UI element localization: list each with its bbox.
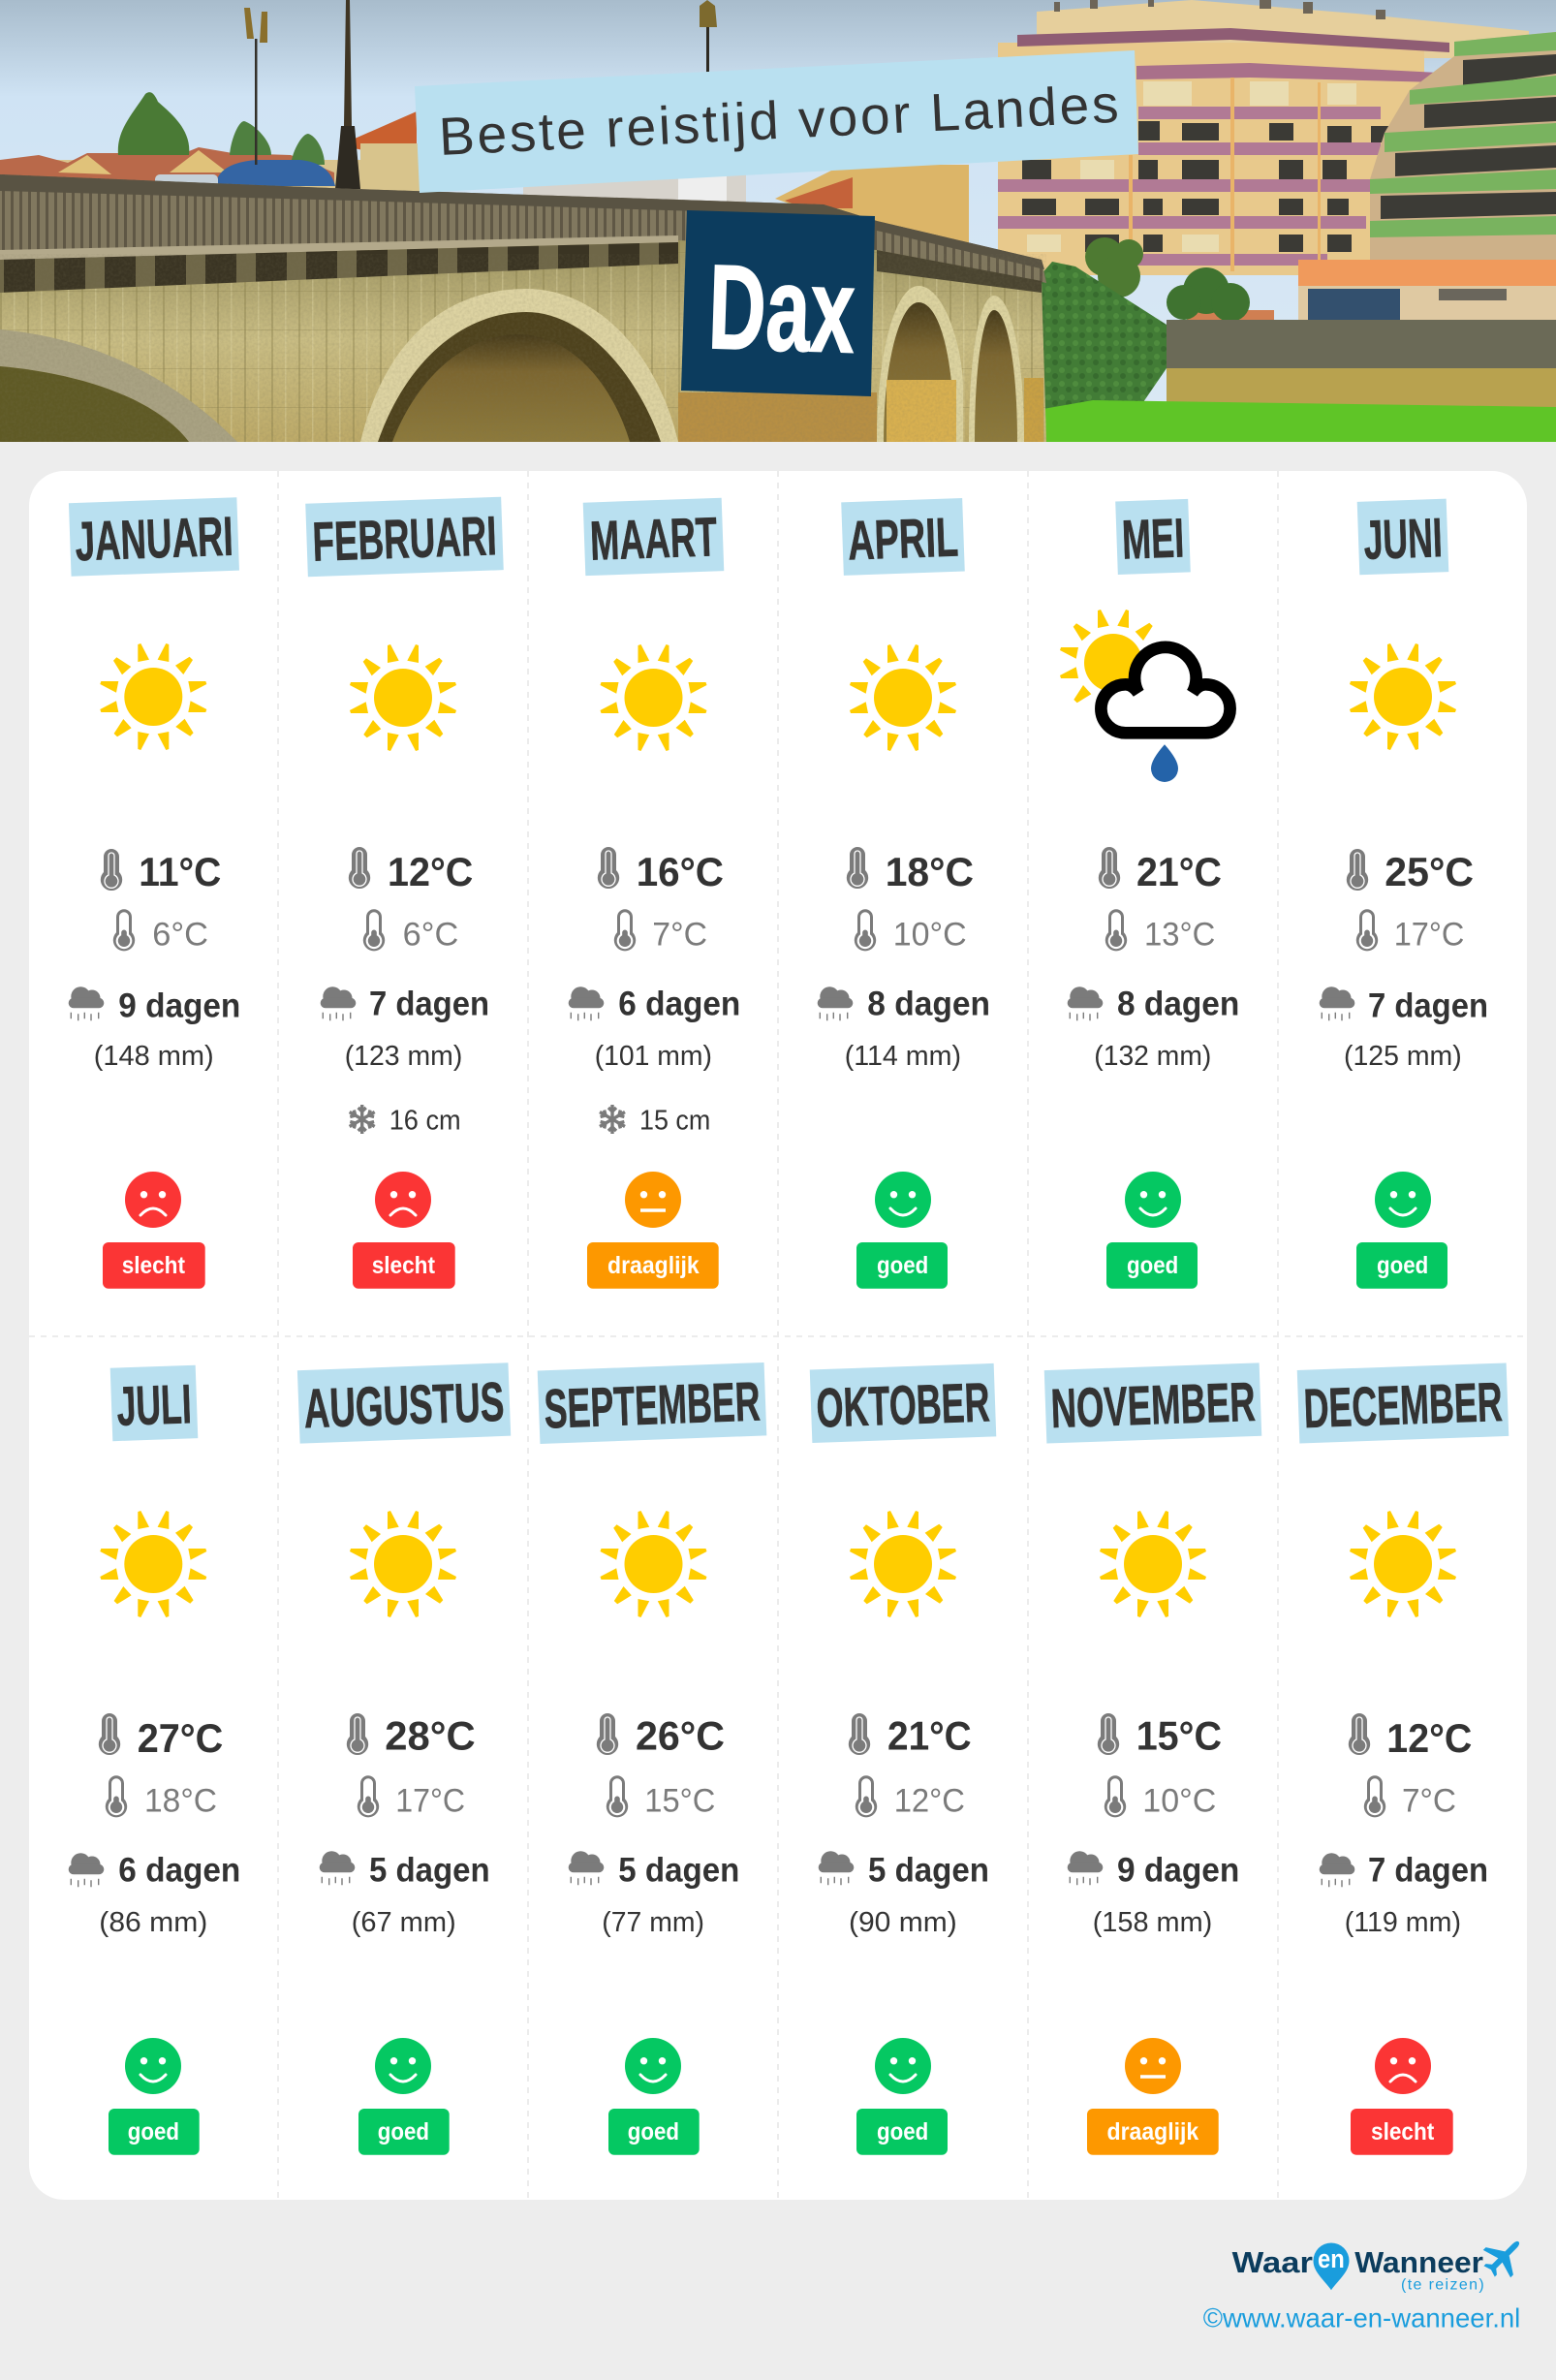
icon: min thermometer <box>1105 1775 1126 1817</box>
icon: max thermometer <box>349 847 370 889</box>
badge: draaglijk <box>587 1242 719 1289</box>
icon: max thermometer <box>101 849 122 891</box>
smiley: goed <box>875 1172 931 1228</box>
icon: min thermometer <box>614 909 636 951</box>
rain days: 9 dagen <box>118 986 240 1024</box>
rainfall: (125 mm) <box>1344 1041 1462 1072</box>
max temperature: 11°C <box>139 849 221 894</box>
month: juni <box>1320 499 1488 1289</box>
badge: goed: goed <box>378 2118 429 2145</box>
heading: april <box>841 498 965 576</box>
heading: oktober: OKTOBER <box>816 1371 991 1440</box>
rain days: 7 dagen <box>369 985 489 1022</box>
rain days: 5 dagen <box>369 1851 490 1889</box>
rainfall: (123 mm) <box>345 1041 462 1072</box>
badge: draaglijk: draaglijk <box>607 1252 700 1279</box>
icon: min thermometer <box>1356 909 1378 951</box>
month: januari <box>69 497 240 1289</box>
snowfall: 15 cm <box>639 1106 710 1137</box>
badge: goed <box>608 2109 700 2155</box>
icon: max thermometer <box>1347 849 1368 891</box>
badge: goed: goed <box>877 2118 928 2145</box>
icon: max thermometer <box>1349 1713 1370 1755</box>
month: mei <box>1060 499 1239 1289</box>
max temperature: 25°C <box>1385 849 1474 894</box>
max temperature: 12°C <box>1386 1715 1472 1761</box>
icon: rain <box>69 1853 104 1887</box>
max temperature: 15°C <box>1136 1713 1222 1759</box>
icon: sun <box>350 644 456 751</box>
title banner <box>415 50 1138 193</box>
badge: goed: goed <box>1377 1252 1428 1279</box>
smiley: slecht <box>125 1172 181 1228</box>
badge: draaglijk <box>1087 2109 1219 2155</box>
icon: location pin <box>1314 2242 1349 2290</box>
city label: Dax <box>706 240 856 379</box>
logo: Waar en Wanneer: Waar <box>1232 2245 1313 2279</box>
min temperature: 10°C <box>893 917 967 954</box>
month: oktober <box>810 1363 996 2155</box>
max temperature: 26°C <box>636 1713 725 1759</box>
badge: goed: goed <box>628 2118 679 2145</box>
heading: april: APRIL <box>847 507 959 572</box>
badge: goed <box>1106 1242 1198 1289</box>
month: maart <box>569 498 740 1289</box>
icon: sun <box>601 1511 707 1617</box>
icon: min thermometer <box>1364 1775 1385 1817</box>
rainfall: (67 mm) <box>352 1907 456 1938</box>
min temperature: 10°C <box>1142 1783 1216 1820</box>
icon: max thermometer <box>849 1713 870 1755</box>
badge: slecht <box>103 1242 205 1289</box>
icon: max thermometer <box>1099 847 1120 889</box>
icon: min thermometer <box>363 909 385 951</box>
smiley: goed <box>1125 1172 1181 1228</box>
icon: rain <box>1068 986 1103 1020</box>
heading: februari: FEBRUARI <box>312 505 498 574</box>
icon: min thermometer <box>1105 909 1127 951</box>
icon: rain <box>320 1851 355 1885</box>
badge: goed <box>856 1242 948 1289</box>
max temperature: 28°C <box>385 1713 476 1759</box>
icon: sun <box>850 1511 956 1617</box>
icon: snow <box>348 1105 377 1134</box>
header photo: bridge in Dax <box>0 0 1556 442</box>
heading: maart <box>583 498 724 576</box>
heading: september <box>538 1362 766 1444</box>
icon: min thermometer <box>106 1775 127 1817</box>
icon: max thermometer <box>598 847 619 889</box>
month: april <box>818 498 990 1289</box>
badge: goed: goed <box>877 1252 928 1279</box>
icon: sun behind cloud with rain drop <box>1060 610 1230 782</box>
rain days: 5 dagen <box>868 1851 989 1889</box>
heading: februari <box>305 497 504 577</box>
heading: augustus: AUGUSTUS <box>302 1371 505 1440</box>
icon: sun <box>1350 1511 1456 1617</box>
icon: max thermometer <box>847 847 868 889</box>
months card <box>29 471 1527 2200</box>
icon: min thermometer <box>113 909 135 951</box>
smiley: goed <box>875 2038 931 2094</box>
badge: goed <box>109 2109 200 2155</box>
rain days: 9 dagen <box>1117 1851 1239 1889</box>
icon: rain <box>1068 1851 1103 1885</box>
badge: draaglijk: draaglijk <box>1106 2118 1198 2145</box>
icon: min thermometer <box>607 1775 628 1817</box>
heading: november <box>1044 1362 1261 1444</box>
rainfall: (101 mm) <box>595 1041 712 1072</box>
icon: sun <box>100 1511 206 1617</box>
heading: mei <box>1115 499 1191 575</box>
max temperature: 12°C <box>388 849 473 894</box>
heading: augustus <box>297 1362 511 1444</box>
rain days: 7 dagen <box>1368 986 1488 1024</box>
smiley: goed <box>125 2038 181 2094</box>
copyright url: ©www.waar-en-wanneer.nl <box>1203 2303 1520 2333</box>
badge: slecht <box>353 1242 455 1289</box>
icon: min thermometer <box>856 1775 877 1817</box>
icon: snow <box>598 1105 627 1134</box>
icon: sun <box>850 644 956 751</box>
min temperature: 13°C <box>1144 917 1215 954</box>
badge: goed <box>358 2109 450 2155</box>
smiley: goed <box>375 2038 431 2094</box>
icon: rain <box>1320 1853 1354 1887</box>
rain days: 6 dagen <box>118 1851 240 1889</box>
heading: januari <box>69 497 239 577</box>
min temperature: 7°C <box>1402 1783 1456 1820</box>
heading: juli: JULI <box>115 1373 193 1438</box>
rainfall: (158 mm) <box>1093 1907 1212 1938</box>
rain days: 7 dagen <box>1368 1851 1488 1889</box>
icon: rain <box>1320 986 1354 1020</box>
icon: rain <box>321 986 356 1020</box>
heading: juni <box>1357 499 1448 575</box>
min temperature: 18°C <box>144 1783 217 1820</box>
icon: min thermometer <box>855 909 876 951</box>
snowfall: 16 cm <box>389 1106 461 1137</box>
rainfall: (77 mm) <box>602 1907 704 1938</box>
badge: slecht: slecht <box>122 1252 186 1279</box>
badge: slecht <box>1351 2109 1453 2155</box>
max temperature: 18°C <box>886 849 974 894</box>
smiley: goed <box>1375 1172 1431 1228</box>
heading: juli <box>110 1365 198 1441</box>
min temperature: 7°C <box>652 917 707 954</box>
icon: rain <box>818 986 853 1020</box>
min temperature: 15°C <box>644 1783 715 1820</box>
min temperature: 12°C <box>894 1783 965 1820</box>
heading: januari: JANUARI <box>75 506 234 573</box>
min temperature: 6°C <box>403 917 458 954</box>
badge: goed <box>856 2109 948 2155</box>
smiley: slecht <box>375 1172 431 1228</box>
rainfall: (90 mm) <box>849 1907 957 1938</box>
heading: september: SEPTEMBER <box>543 1370 762 1441</box>
month: december <box>1297 1362 1509 2155</box>
month: september <box>538 1362 766 2155</box>
logo: Waar en Wanneer <box>1232 2228 1533 2294</box>
icon: sun <box>100 643 206 750</box>
min temperature: 17°C <box>395 1783 465 1820</box>
city label <box>681 210 875 396</box>
title banner: Beste reistijd voor Landes <box>438 74 1120 167</box>
min temperature: 6°C <box>152 917 208 954</box>
smiley: slecht <box>1375 2038 1431 2094</box>
rainfall: (148 mm) <box>94 1041 214 1072</box>
rain days: 6 dagen <box>618 985 740 1022</box>
icon: max thermometer <box>597 1713 618 1755</box>
icon: max thermometer <box>347 1713 368 1755</box>
heading: mei: MEI <box>1121 507 1185 572</box>
heading: oktober <box>810 1363 996 1443</box>
rainfall: (132 mm) <box>1094 1041 1211 1072</box>
max temperature: 16°C <box>637 849 724 894</box>
smiley: goed <box>625 2038 681 2094</box>
heading: maart: MAART <box>589 506 718 573</box>
rainfall: (114 mm) <box>845 1041 961 1072</box>
max temperature: 27°C <box>138 1715 223 1761</box>
icon: max thermometer <box>99 1713 120 1755</box>
logo: Waar en Wanneer: Wanneer <box>1354 2245 1483 2279</box>
month: februari <box>305 497 504 1289</box>
badge: goed: goed <box>1127 1252 1178 1279</box>
icon: sun <box>350 1511 456 1617</box>
icon: rain <box>69 986 104 1020</box>
smiley: draaglijk <box>625 1172 681 1228</box>
icon: min thermometer <box>358 1775 379 1817</box>
icon: sun <box>1100 1511 1206 1617</box>
heading: juni: JUNI <box>1362 507 1444 572</box>
icon: sun <box>1350 643 1456 750</box>
icon: rain <box>569 1851 604 1885</box>
max temperature: 21°C <box>1136 849 1222 894</box>
min temperature: 17°C <box>1394 917 1464 954</box>
logo: Waar en Wanneer: en <box>1318 2244 1345 2273</box>
rainfall: (86 mm) <box>99 1907 207 1938</box>
month: juli <box>69 1365 240 2155</box>
month: augustus <box>297 1362 511 2155</box>
badge: goed: goed <box>128 2118 179 2145</box>
badge: goed <box>1356 1242 1447 1289</box>
smiley: draaglijk <box>1125 2038 1181 2094</box>
heading: november: NOVEMBER <box>1050 1371 1257 1440</box>
rainfall: (119 mm) <box>1345 1907 1461 1938</box>
icon: sun <box>601 644 707 751</box>
icon: max thermometer <box>1098 1713 1119 1755</box>
rain days: 8 dagen <box>867 985 990 1022</box>
rain days: 5 dagen <box>618 1851 739 1889</box>
logo: Waar en Wanneer: (te reizen) <box>1401 2277 1484 2294</box>
month: november <box>1044 1362 1261 2155</box>
icon: rain <box>819 1851 854 1885</box>
icon: rain <box>569 986 604 1020</box>
badge: slecht: slecht <box>1371 2118 1435 2145</box>
badge: slecht: slecht <box>372 1252 436 1279</box>
rain days: 8 dagen <box>1117 985 1239 1022</box>
max temperature: 21°C <box>887 1713 972 1759</box>
icon: airplane <box>1476 2228 1533 2285</box>
